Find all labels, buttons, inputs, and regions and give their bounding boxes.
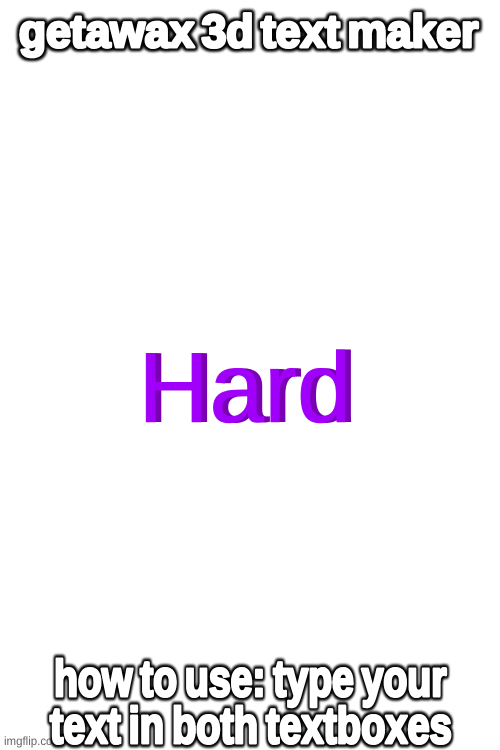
3D word: Hard: Hard xyxy=(142,332,355,444)
3D word: Hard: Hard xyxy=(140,332,353,444)
instructions: how to use: type your xyxy=(54,650,447,707)
3D word: Hard: Hard xyxy=(144,332,357,444)
title: getawax 3d text maker xyxy=(19,5,478,57)
3D word: Hard: Hard xyxy=(138,332,351,444)
instructions xyxy=(50,650,452,750)
watermark: imgflip.com xyxy=(4,734,62,748)
